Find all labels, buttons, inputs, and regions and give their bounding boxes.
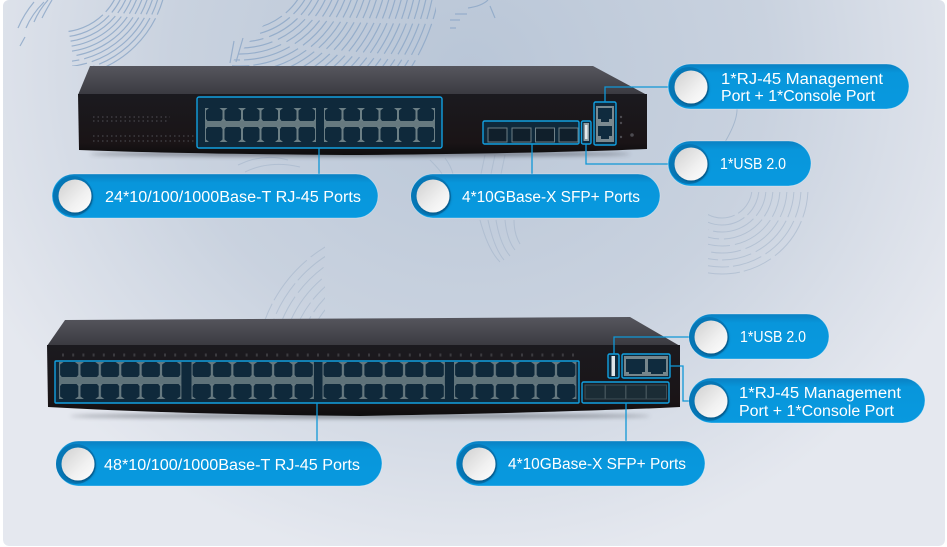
connector: 48 RJ-45 ports xyxy=(316,403,318,442)
label: 24 RJ-45 ports xyxy=(52,174,378,218)
lower fingerprint traces xyxy=(238,109,808,319)
label disc xyxy=(689,317,729,357)
switch 1 front panel xyxy=(78,94,647,155)
connector: top USB xyxy=(586,144,669,164)
label text: 24*10/100/1000Base-T RJ-45 Ports xyxy=(105,189,361,206)
background fingerprint map pattern xyxy=(18,0,496,66)
label disc xyxy=(56,444,96,484)
highlight: 24 RJ-45 ports xyxy=(197,97,442,148)
label: top management port xyxy=(668,64,909,109)
switch 2 port LEDs xyxy=(62,354,574,356)
label: bottom SFP+ ports xyxy=(456,441,705,486)
switch 2: 48-port device xyxy=(47,317,680,418)
switch 1 shadow xyxy=(90,152,630,156)
connector: bottom USB xyxy=(614,337,690,354)
connector: top SFP+ ports xyxy=(531,144,533,175)
label disc xyxy=(689,381,729,421)
highlight: USB port xyxy=(582,121,591,144)
RJ-45 port block 2 xyxy=(192,362,314,399)
label disc xyxy=(457,444,497,484)
RJ-45 port block right xyxy=(324,108,435,142)
label text: top management port, second line: Port + 1*Console Port xyxy=(721,88,876,105)
switch 2 shadow xyxy=(70,414,650,418)
status LEDs xyxy=(620,116,634,138)
switch 1: 24-port device xyxy=(78,66,647,156)
label text: 1*USB 2.0 xyxy=(720,156,786,173)
RJ-45 port block 3 xyxy=(322,362,445,399)
connector: 24 RJ-45 ports xyxy=(318,148,320,175)
highlight: management and console ports xyxy=(622,354,670,378)
RJ-45 port block left xyxy=(205,108,316,142)
label text: 48*10/100/1000Base-T RJ-45 Ports xyxy=(104,457,360,474)
label disc xyxy=(411,176,451,216)
label: bottom USB xyxy=(689,314,829,359)
label text: 1*RJ-45 Management xyxy=(721,71,884,88)
connector: top management port xyxy=(605,87,669,102)
switch 2 front panel xyxy=(47,345,680,416)
label disc xyxy=(669,67,709,107)
label disc xyxy=(669,144,709,184)
highlight: management and console ports xyxy=(594,102,616,145)
switch 1 top plate xyxy=(78,66,647,95)
label text: 4*10GBase-X SFP+ Ports xyxy=(508,456,686,473)
connector: bottom management port xyxy=(670,366,690,401)
label: 48 RJ-45 ports xyxy=(56,441,382,486)
label text: bottom management port, second line: Port + 1*Console Port xyxy=(739,403,895,420)
RJ-45 port block 1 xyxy=(59,362,181,399)
highlight: 48 RJ-45 ports xyxy=(55,361,579,403)
label text: 1*USB 2.0 xyxy=(740,329,806,346)
highlight: 4 SFP+ ports xyxy=(582,382,669,403)
highlight: USB port xyxy=(608,354,619,378)
switch 1 vent dots xyxy=(93,117,196,141)
label: top USB xyxy=(668,141,811,186)
connector: bottom SFP+ ports xyxy=(625,403,627,442)
highlight: 4 SFP+ ports xyxy=(483,121,579,144)
RJ-45 port block 4 xyxy=(454,362,576,399)
label text: 4*10GBase-X SFP+ Ports xyxy=(462,189,640,206)
switch 2 top plate xyxy=(47,317,680,346)
label: bottom management port xyxy=(689,378,925,423)
label disc xyxy=(53,176,93,216)
label: top SFP+ ports xyxy=(411,174,660,218)
label text: 1*RJ-45 Management xyxy=(739,385,902,402)
